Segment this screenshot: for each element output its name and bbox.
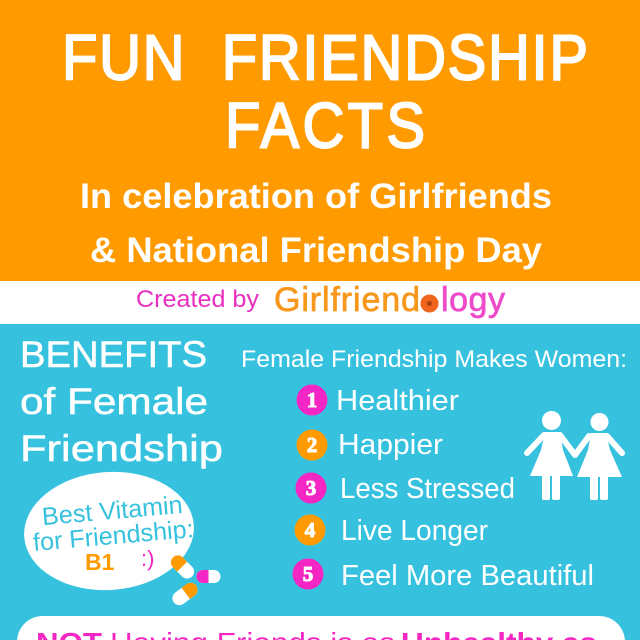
list: benefit 4: Live Longer [341,515,488,547]
subtitle: In celebration of Girlfriends [80,177,552,216]
credit label: Created by [136,286,259,313]
logo [274,281,505,319]
subtitle [80,177,552,270]
benefits heading [20,334,223,469]
logo: logy [441,281,505,319]
panel: orange header [0,0,640,281]
subtitle: & National Friendship Day [90,231,543,270]
panel: credit strip [0,281,640,324]
list: benefit 2 [296,429,443,461]
list: benefit 5: Feel More Beautiful [341,560,594,592]
list: benefit 3: 3 [306,476,316,500]
list heading: Female Friendship Makes Women: [241,346,627,373]
callout: best vitamin bubble: Best Vitamin [41,491,184,531]
callout: best vitamin bubble [20,466,198,596]
list: benefit 4: 4 [305,518,316,542]
benefits heading: BENEFITS [20,334,207,375]
benefits heading: of Female [20,381,208,422]
logo: Girlfriend [274,281,420,319]
list: benefit 2: 2 [307,433,317,457]
icon: flower [420,294,438,312]
title: FUN FRIENDSHIP [62,22,588,93]
panel: unhealthy callout [17,616,625,640]
list: benefit 1: 1 [307,388,317,412]
benefits heading: Friendship [20,428,223,469]
list: benefit 2: Happier [338,429,443,461]
list: benefit 1: Healthier [336,385,459,417]
icon: vitamin pills [168,553,220,608]
callout: best vitamin bubble: B1 [85,549,115,575]
title [62,22,588,161]
icon: two women holding hands [527,411,622,500]
callout: best vitamin bubble: :) [141,546,154,571]
callout text [36,627,597,640]
list: benefit 5: 5 [303,562,313,586]
list: benefit 3: Less Stressed [340,473,515,505]
callout: best vitamin bubble: for Friendship: [32,515,195,557]
title: FACTS [225,90,425,161]
panel: benefits [0,324,640,640]
